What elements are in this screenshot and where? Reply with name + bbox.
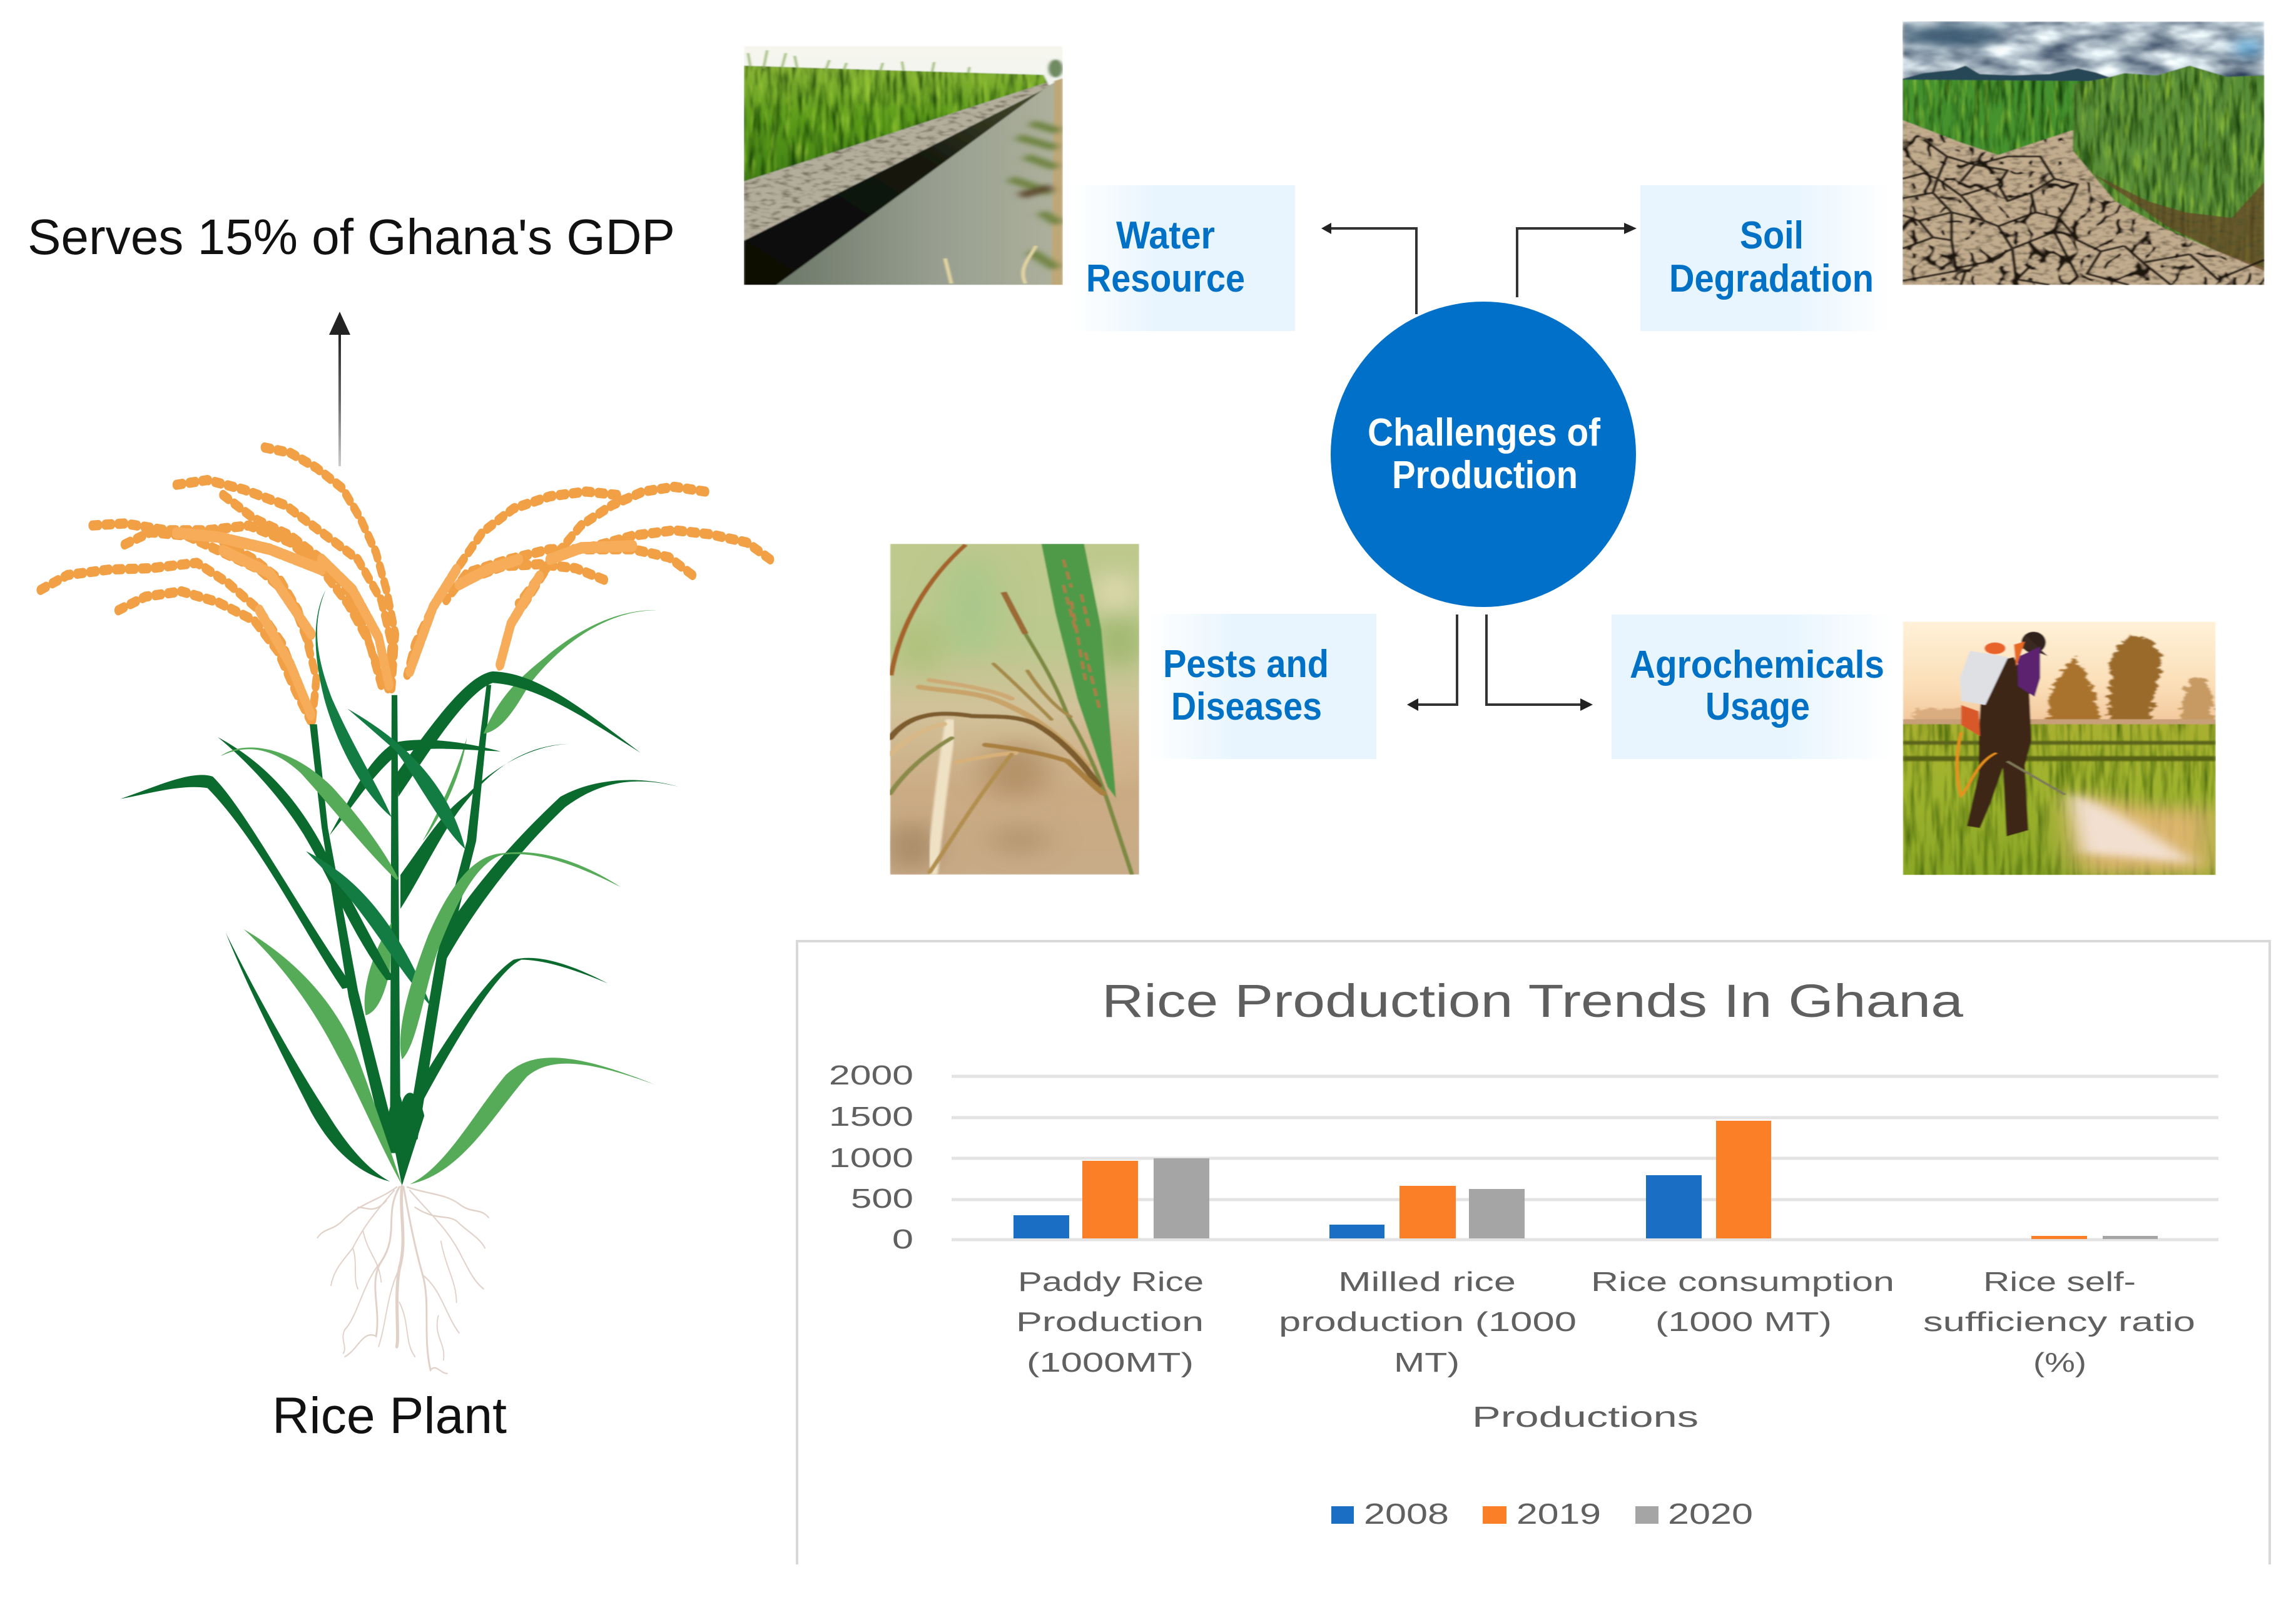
label: Rice Plant: Rice Plant xyxy=(272,1387,507,1444)
category labels: production (1000 xyxy=(1279,1307,1577,1337)
arrow: to Agrochemicals Usage xyxy=(1486,615,1593,711)
chart title: Rice Production Trends In Ghana xyxy=(1102,975,1964,1027)
roots xyxy=(317,1187,489,1374)
callout box: Agrochemicals Usage: Agrochemicals xyxy=(1630,643,1884,686)
callout box: Soil Degradation: Degradation xyxy=(1669,257,1874,300)
callout box: Water Resource: Water xyxy=(1116,214,1215,257)
panel: rice production chart xyxy=(797,941,2270,1564)
legend xyxy=(1331,1497,1753,1530)
callout box: Water Resource xyxy=(1071,185,1295,331)
soil cracks xyxy=(1902,140,2264,285)
category labels: Milled rice xyxy=(1338,1267,1516,1297)
y axis labels: 0 xyxy=(892,1224,913,1255)
callout box: Pests and Diseases xyxy=(1149,614,1376,759)
legend: 2008 xyxy=(1364,1497,1449,1530)
dark green leaves xyxy=(120,671,678,1181)
category labels: sufficiency ratio xyxy=(1923,1307,2195,1337)
mid green leaves xyxy=(306,590,465,1007)
arrow: to Soil Degradation xyxy=(1517,223,1637,297)
callout box: Soil Degradation xyxy=(1640,185,1891,331)
gridlines xyxy=(952,1076,2218,1240)
y axis labels xyxy=(829,1060,913,1255)
category labels: Rice self- xyxy=(1983,1267,2136,1297)
central circle: Challenges of Production: Production xyxy=(1392,454,1578,497)
photo: irrigation canal xyxy=(744,46,1063,285)
category labels xyxy=(1016,1267,2195,1378)
arrow: to Water Resource xyxy=(1321,223,1416,314)
category labels: Rice consumption xyxy=(1591,1267,1894,1297)
light green leaves behind xyxy=(365,610,656,1016)
bars: 2019 xyxy=(1082,1121,2087,1239)
stems xyxy=(310,685,491,1186)
central circle: Challenges of Production: Challenges of xyxy=(1368,411,1600,454)
arrow: rice plant to GDP xyxy=(329,312,350,466)
photo: diseased rice panicle xyxy=(888,544,1139,875)
rice grain panicles xyxy=(41,447,770,720)
light green leaves in front xyxy=(220,748,656,1185)
y axis labels: 1000 xyxy=(829,1143,913,1173)
photo: farmer spraying field xyxy=(1903,621,2216,875)
category labels: Paddy Rice xyxy=(1018,1267,1204,1297)
callout box: Soil Degradation: Soil xyxy=(1740,214,1804,257)
y axis labels: 1500 xyxy=(829,1101,913,1132)
heading: GDP statement: Serves 15% of Ghana's GDP xyxy=(28,209,675,265)
callout box: Pests and Diseases: Pests and xyxy=(1163,643,1329,686)
callout box: Water Resource: Resource xyxy=(1086,257,1245,300)
photo: cracked soil xyxy=(1900,21,2264,285)
callout box: Agrochemicals Usage xyxy=(1612,615,1893,759)
legend: 2019 xyxy=(1516,1497,1601,1530)
category labels: (1000MT) xyxy=(1027,1347,1194,1378)
bars: 2020 xyxy=(1154,1158,2158,1239)
y axis labels: 500 xyxy=(851,1183,913,1214)
bars: 2008 xyxy=(1013,1175,1702,1238)
category labels: Production xyxy=(1016,1307,1204,1337)
y axis labels: 2000 xyxy=(829,1060,913,1091)
legend: 2020 xyxy=(1668,1497,1753,1530)
category labels: (%) xyxy=(2033,1347,2086,1378)
category labels: (1000 MT) xyxy=(1655,1307,1832,1337)
arrow: to Pests and Diseases xyxy=(1407,615,1457,711)
callout box: Pests and Diseases: Diseases xyxy=(1171,685,1322,728)
x axis title: Productions xyxy=(1472,1400,1699,1433)
illustration: rice plant xyxy=(41,447,770,1374)
spray mist xyxy=(2068,793,2216,875)
farmer xyxy=(1967,657,2031,837)
category labels: MT) xyxy=(1394,1347,1460,1378)
central circle: Challenges of Production xyxy=(1331,302,1636,607)
callout box: Agrochemicals Usage: Usage xyxy=(1705,685,1810,728)
